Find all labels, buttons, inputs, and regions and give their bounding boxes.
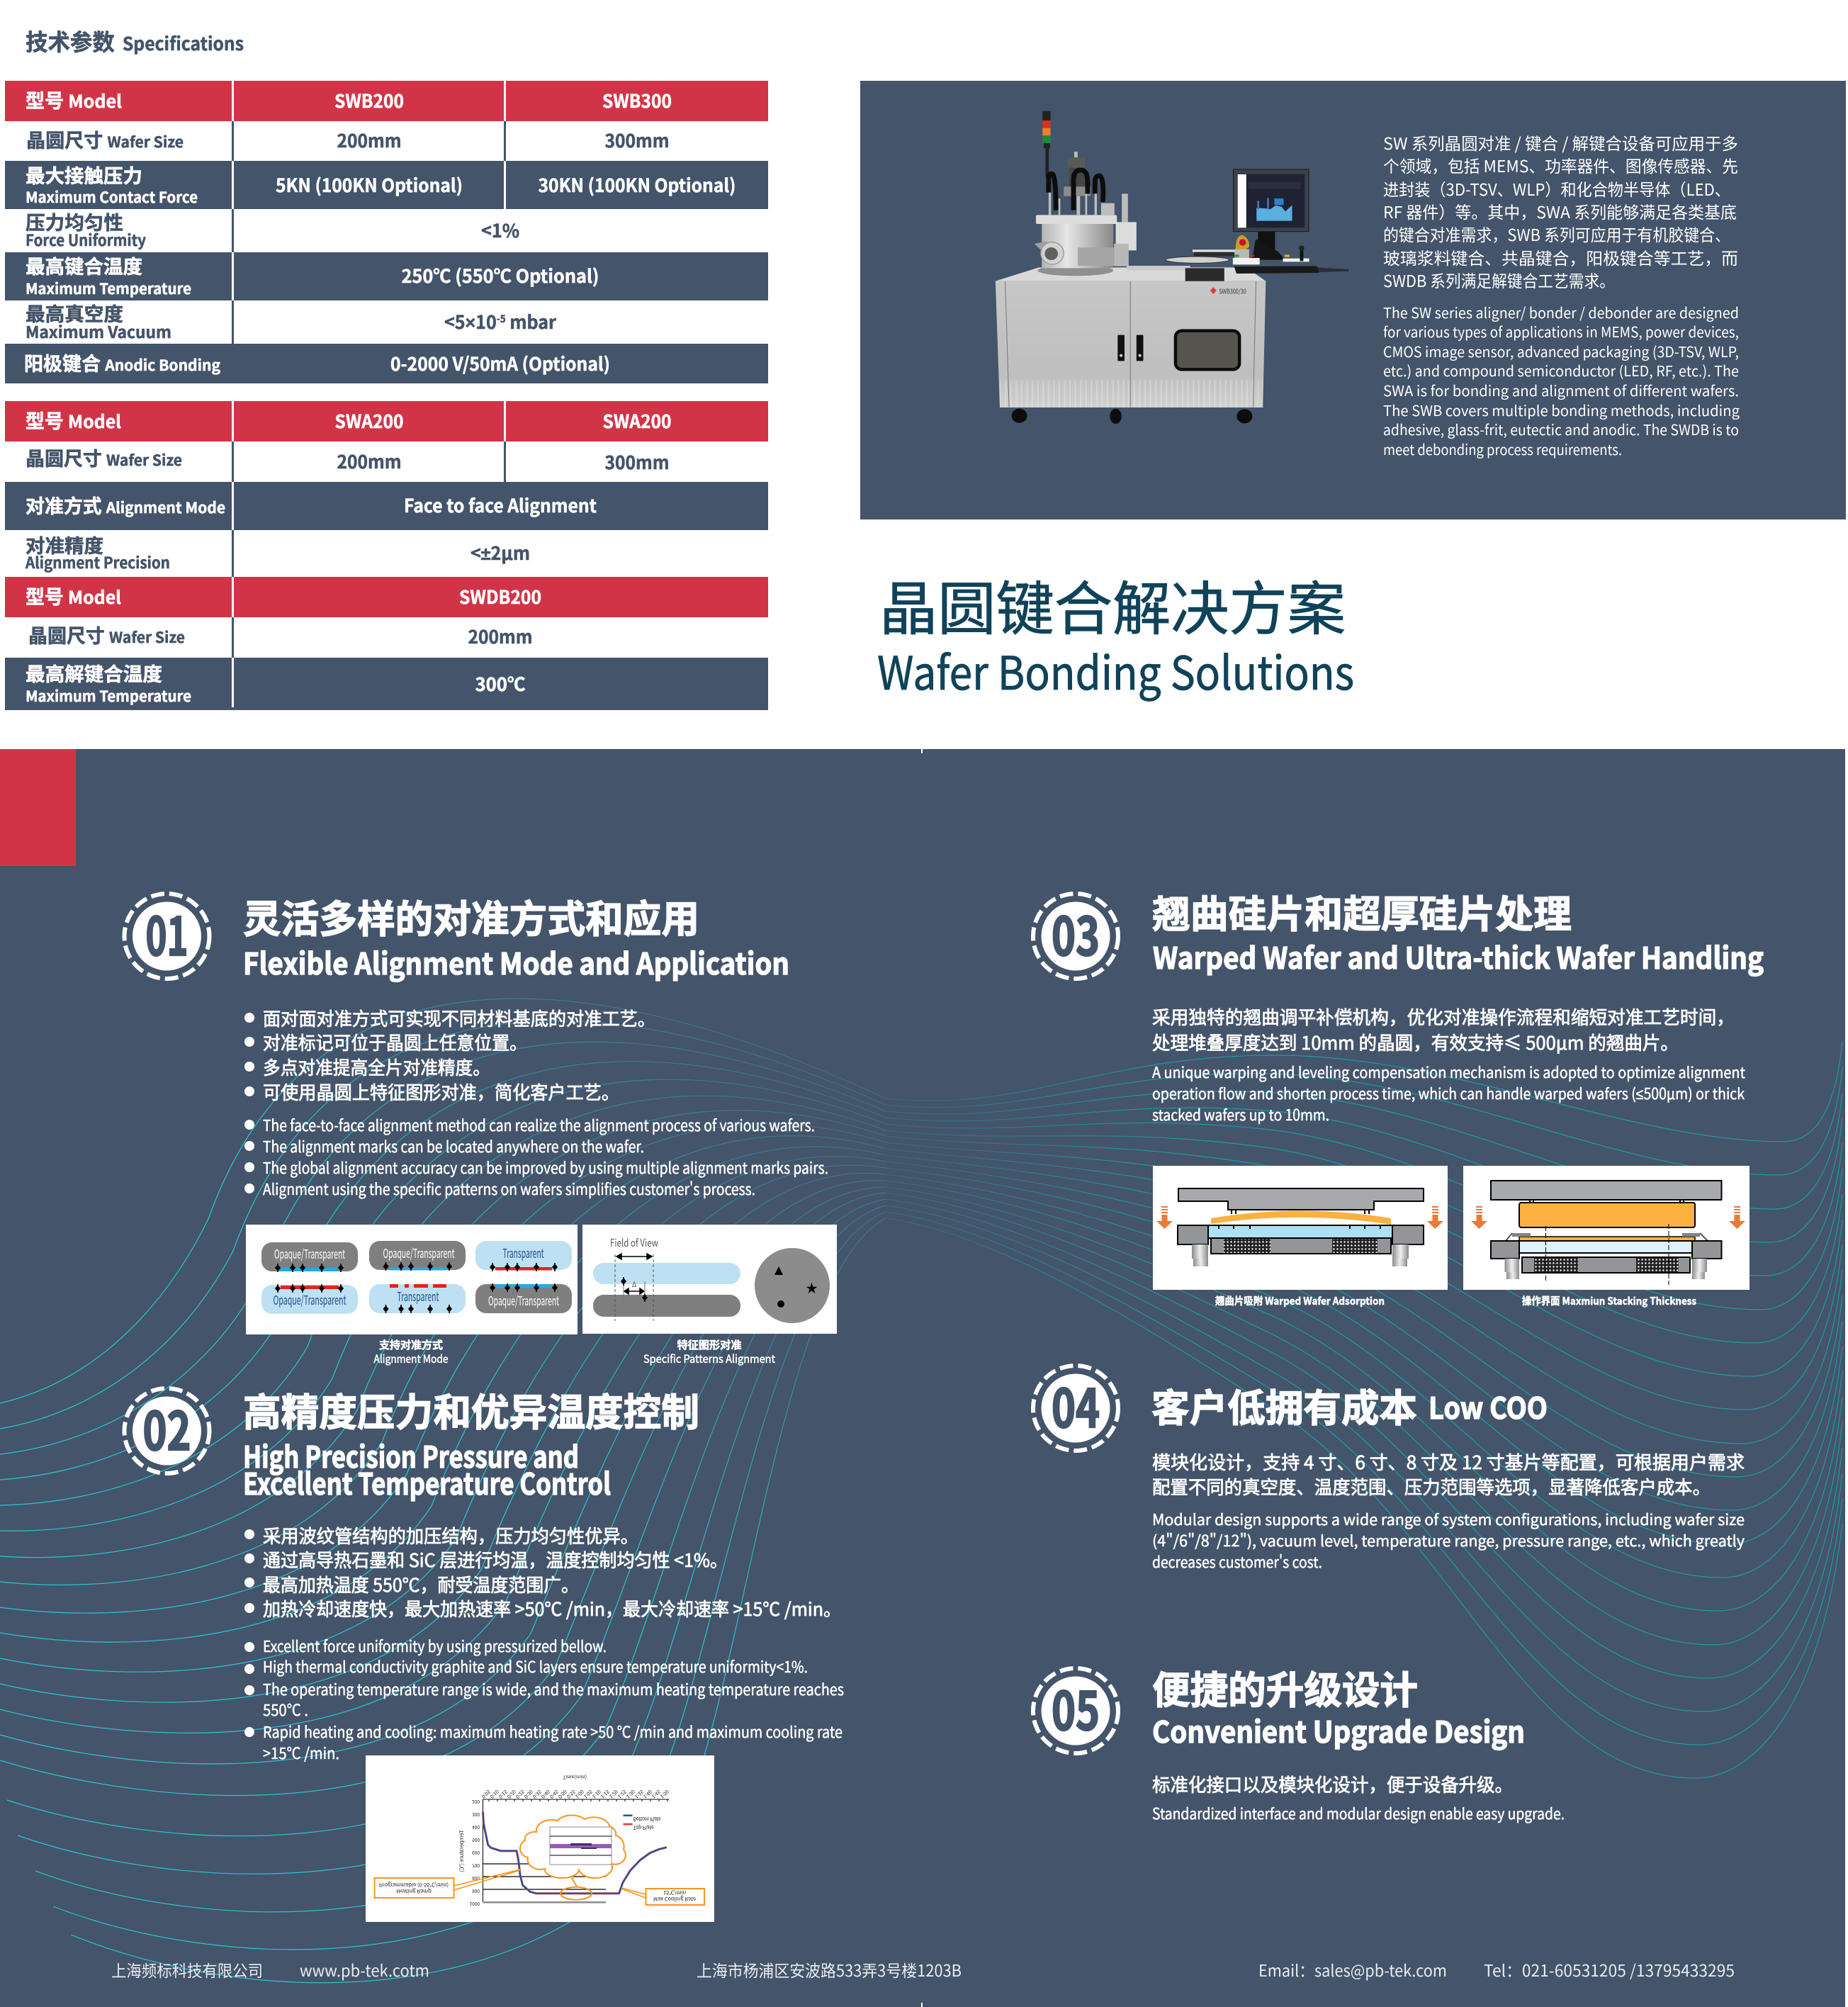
row: wafer size SWA: 200mm — [337, 448, 401, 474]
chart: temperature profile: Top Plate — [633, 1823, 654, 1831]
text: Chinese overview: SW 系列晶圆对准 / 键合 / 解键合设备可应用于多 — [1383, 130, 1738, 154]
row: wafer size: 300mm — [605, 127, 669, 153]
list: 01 English bullets — [244, 1113, 828, 1200]
diagram: alignment modes: Opaque/Transparent — [274, 1291, 346, 1309]
footer: contact information — [111, 1957, 1735, 1981]
row: maximum bonding temperature — [26, 252, 599, 299]
chart: temperature profile: 0:20 — [505, 1788, 517, 1800]
chart axis labels (flipped): 700 — [472, 1862, 480, 1870]
diagram: alignment modes: Opaque/Transparent — [488, 1291, 559, 1310]
chart: temperature profile: 1:30 — [624, 1788, 636, 1800]
section 04: low COO — [1033, 1366, 1745, 1573]
text: English overview: SWA is for bonding and alignment of different wafers. — [1383, 379, 1739, 400]
row: model SWA: SWA200 — [602, 407, 672, 434]
row: model: SWB200 — [334, 87, 404, 113]
chart: temperature profile: 1:45 — [650, 1788, 662, 1800]
text: English overview: meet debonding process requirements. — [1383, 438, 1622, 459]
illustration: bonding machine — [996, 111, 1348, 424]
text: 03 Chinese paragraph — [1152, 1004, 1735, 1055]
text: Chinese overview: 的键合对准需求，SWB 系列可应用于有机胶键合、 — [1383, 222, 1730, 246]
text: 04 English paragraph: Modular design supports a wide range of system configurations, including wafer size — [1152, 1508, 1745, 1530]
row: force uniformity: Force Uniformity — [26, 228, 146, 251]
row: anodic bonding — [24, 349, 610, 376]
chart axis labels (flipped): 600 — [472, 1850, 480, 1857]
chart: temperature profile: 1:05 — [582, 1788, 594, 1800]
table: SWB specifications — [5, 81, 768, 383]
row: maximum debonding temperature: 300℃ — [475, 670, 526, 697]
row: alignment precision: 对准精度 — [26, 531, 103, 558]
icon: down arrow right — [1427, 1206, 1443, 1229]
badge: 03 — [1033, 894, 1118, 979]
row: model — [26, 86, 672, 113]
heading: specifications: 技术参数 Specifications — [26, 24, 244, 57]
chart: temperature profile: 0:50 — [556, 1788, 568, 1800]
badge: 02 — [125, 1388, 210, 1473]
diagram: alignment modes: Opaque/Transparent — [274, 1244, 345, 1263]
row: maximum bonding temperature: Maximum Temperature — [26, 278, 191, 299]
list: 02 English bullets: Rapid heating and cooling: maximum heating rate >50 ℃ /min and maximum cooling rate — [263, 1720, 843, 1743]
chart: temperature profile: 0:15 — [497, 1788, 509, 1800]
table: SWA and SWDB specifications — [5, 401, 768, 710]
caption: warped wafer adsorption: 翘曲片吸附 Warped Wafer Adsorption — [1215, 1293, 1385, 1308]
row: maximum contact force: 最大接触压力 — [26, 161, 142, 189]
heading: 04: 客户低拥有成本 — [1151, 1377, 1417, 1433]
text: English overview: etc.) and compound semiconductor (LED, RF, etc.). The — [1383, 359, 1739, 381]
caption: alignment mode — [374, 1337, 448, 1366]
chart axis labels (flipped) — [470, 1799, 480, 1908]
panel: product overview — [860, 81, 1846, 519]
text: English overview: The SWB covers multiple bonding methods, including — [1383, 399, 1740, 420]
chart: temperature profile: 1:10 — [590, 1788, 602, 1800]
text: Chinese overview: 进封装（3D-TSV、WLP）和化合物半导体（LED、 — [1383, 176, 1730, 201]
section 03: warped wafer handling — [1033, 883, 1764, 1308]
row: model SWDB: 型号 Model — [26, 582, 121, 609]
chart: temperature profile: 1:50 — [658, 1788, 670, 1800]
chart: temperature profile: 1:35 — [633, 1788, 645, 1800]
chart axis labels (flipped): 500 — [472, 1837, 480, 1844]
row: alignment precision: <±2µm — [471, 539, 530, 566]
diagram: specific patterns: Field of View — [610, 1235, 658, 1250]
section 02: pressure and temperature — [125, 1381, 844, 1922]
caption: maximum stacking thickness: 操作界面 Maxmiun Stacking Thickness — [1522, 1293, 1696, 1308]
row: wafer size SWDB: 200mm — [468, 623, 533, 649]
section 01: flexible alignment — [125, 888, 837, 1366]
chart axis labels (flipped): 200 — [472, 1799, 480, 1806]
row: maximum bonding temperature: 250℃ (550℃ Optional) — [401, 262, 599, 288]
row: force uniformity — [26, 208, 519, 251]
chart axis labels (flipped): 1000 — [470, 1901, 480, 1908]
text: 03 English paragraph: operation flow and shorten process time, which can handle warped wafers (≤500µm) or thick — [1152, 1082, 1745, 1104]
diagram: warped wafer adsorption — [1153, 1166, 1448, 1290]
row: maximum vacuum: <5×10 — [444, 308, 497, 334]
row: wafer size SWA — [26, 444, 669, 475]
row: alignment mode — [26, 491, 597, 519]
chart: temperature profile: 0:55 — [565, 1788, 577, 1800]
badge: 02: 02 — [143, 1390, 191, 1466]
row: model SWDB — [26, 582, 541, 609]
chart axis labels (flipped): 400 — [472, 1824, 480, 1831]
text: 04 English paragraph: (4"/6"/8"/12"), vacuum level, temperature range, pressure range, etc., which greatly — [1152, 1529, 1745, 1551]
list: 02 Chinese bullets: 加热冷却速度快，最大加热速率 >50℃ /min，最大冷却速率 >15℃ /min。 — [263, 1595, 841, 1621]
text: 03 Chinese paragraph: 处理堆叠厚度达到 10mm 的晶圆，有效支持≤ 500µm 的翘曲片。 — [1152, 1029, 1679, 1055]
text: English overview — [1383, 301, 1740, 459]
badge: 01 — [125, 894, 210, 979]
heading: 03 English: Warped Wafer and Ultra-thick Wafer Handling — [1153, 935, 1764, 978]
chart axis labels (flipped): 300 — [472, 1811, 480, 1818]
heading: 05 English: Convenient Upgrade Design — [1152, 1709, 1525, 1752]
row: maximum debonding temperature — [26, 659, 526, 707]
chart: temperature profile: 1:00 — [573, 1788, 585, 1800]
illustration: bonding machine: SWB300/30 — [1219, 286, 1246, 296]
badge: 05 — [1033, 1668, 1118, 1753]
heading: 04 — [1151, 1377, 1548, 1433]
list: 02 English bullets: Excellent force uniformity by using pressurized bellow. — [263, 1634, 607, 1657]
row: maximum vacuum: 最高真空度 — [26, 299, 123, 327]
heading: 02 Chinese: 高精度压力和优异温度控制 — [243, 1381, 699, 1437]
heading: 02 English — [243, 1434, 611, 1504]
list: 01 Chinese bullets: 对准标记可位于晶圆上任意位置。 — [263, 1029, 527, 1055]
list: 01 Chinese bullets — [244, 1005, 655, 1105]
chart: temperature profile: 1:40 — [641, 1788, 653, 1800]
caption: specific patterns — [643, 1337, 775, 1366]
list: 02 Chinese bullets — [244, 1522, 841, 1621]
text: Chinese overview: 个领域，包括 MEMS、功率器件、图像传感器、先 — [1383, 153, 1738, 177]
row: wafer size: 200mm — [337, 127, 401, 153]
badge: 03: 03 — [1052, 895, 1100, 971]
row: wafer size SWA: 300mm — [605, 449, 669, 475]
footer: contact information: 上海市杨浦区安波路533弄3号楼1203B — [697, 1957, 962, 1981]
chart: temperature profile: 15℃/min — [663, 1889, 686, 1896]
list: 02 English bullets: >15℃ /min. — [263, 1741, 339, 1764]
row: maximum contact force: 30KN (100KN Optional) — [539, 172, 736, 198]
footer: contact information: www.pb-tek.cotm — [300, 1957, 429, 1981]
row: model: 型号 Model — [26, 86, 122, 113]
diagram: maximum stacking thickness — [1463, 1166, 1750, 1290]
section 05: upgrade design — [1033, 1659, 1565, 1824]
heading: 04: Low COO — [1429, 1385, 1548, 1428]
text: Chinese overview — [1383, 130, 1738, 292]
row: model SWA — [26, 406, 672, 434]
diagram: alignment modes: Opaque/Transparent — [383, 1244, 455, 1262]
chart axis labels (flipped): 900 — [472, 1888, 480, 1895]
chart: temperature profile: Heating Ramp — [396, 1887, 432, 1895]
heading: 03 Chinese: 翘曲硅片和超厚硅片处理 — [1152, 883, 1572, 939]
icon: down arrow left — [1471, 1206, 1487, 1229]
row: wafer size SWDB: 晶圆尺寸 Wafer Size — [28, 621, 185, 648]
row: maximum vacuum: -5 — [497, 312, 506, 326]
text: English overview: for various types of applications in MEMS, power devices, — [1383, 320, 1739, 342]
text: 04 Chinese paragraph: 模块化设计，支持 4 寸、6 寸、8 寸及 12 寸基片等配置，可根据用户需求 — [1152, 1449, 1745, 1475]
badge: 04: 04 — [1052, 1367, 1100, 1443]
chart: temperature profile: 0:35 — [531, 1788, 543, 1800]
heading: 02 English: High Precision Pressure and — [243, 1434, 579, 1477]
title: Chinese: 晶圆键合解决方案 — [879, 562, 1346, 646]
row: model SWA: 型号 Model — [26, 406, 121, 434]
text: Chinese overview: 玻璃浆料键合、共晶键合，阳极键合等工艺，而 — [1383, 245, 1738, 269]
row: wafer size SWDB — [28, 621, 533, 649]
heading: 01 English: Flexible Alignment Mode and Application — [243, 940, 789, 984]
diagram: specific patterns: Δ — [632, 1278, 637, 1289]
row: wafer size — [26, 125, 669, 153]
row: alignment precision: Alignment Precision — [25, 551, 170, 573]
row: alignment mode: 对准方式 Alignment Mode — [26, 491, 225, 519]
title: English: Wafer Bonding Solutions — [877, 636, 1354, 703]
text: English overview: The SW series aligner/ bonder / debonder are designed — [1383, 301, 1739, 322]
row: model SWA: SWA200 — [334, 407, 404, 434]
row: maximum vacuum: mbar — [506, 308, 557, 334]
text: English overview: adhesive, glass-frit, eutectic and anodic. The SWDB is to — [1383, 418, 1739, 439]
chart axis labels (flipped): 800 — [472, 1875, 480, 1882]
list: 01 English bullets: Alignment using the specific patterns on wafers simplifies customer's process. — [263, 1177, 755, 1200]
row: alignment mode: Face to face Alignment — [404, 492, 597, 518]
chart: temperature profile: 0:10 — [488, 1788, 500, 1800]
row: maximum debonding temperature: 最高解键合温度 — [26, 659, 162, 687]
row: maximum vacuum — [26, 299, 557, 343]
text: 03 English paragraph — [1152, 1061, 1745, 1125]
icon: down arrow left — [1156, 1206, 1173, 1229]
caption: specific patterns: Specific Patterns Alignment — [643, 1351, 775, 1366]
list: 02 Chinese bullets: 采用波纹管结构的加压结构，压力均匀性优异。 — [263, 1522, 638, 1548]
chart: temperature profile: 0:05 — [480, 1788, 492, 1800]
diagram: specific patterns: ★ — [806, 1278, 818, 1296]
row: anodic bonding: 0-2000 V/50mA (Optional) — [390, 350, 610, 376]
chart: temperature profile: 0:30 — [522, 1788, 534, 1800]
diagram: specific patterns — [582, 1225, 837, 1334]
list: 01 Chinese bullets: 可使用晶圆上特征图形对准，简化客户工艺。 — [263, 1079, 619, 1105]
badge: 05: 05 — [1052, 1670, 1100, 1745]
chart: temperature profile: 1:15 — [599, 1788, 611, 1800]
badge: 04 — [1033, 1366, 1118, 1451]
text: Chinese overview: SWDB 系列满足解键合工艺需求。 — [1383, 268, 1615, 292]
list: 02 Chinese bullets: 通过高导热石墨和 SiC 层进行均温，温度控制均匀性 <1%。 — [263, 1546, 728, 1573]
list: 01 Chinese bullets: 多点对准提高全片对准精度。 — [263, 1054, 490, 1080]
list: 02 English bullets: 550℃ . — [263, 1698, 308, 1721]
diagram: alignment modes: Transparent — [503, 1244, 544, 1262]
icon: down arrow right — [1729, 1206, 1745, 1229]
text: 04 English paragraph — [1152, 1508, 1745, 1573]
list: 02 English bullets: High thermal conductivity graphite and SiC layers ensure temperature uniformity<1%. — [263, 1655, 808, 1677]
panel: feature background — [0, 749, 1845, 2007]
chart: temperature profile: 1:20 — [607, 1788, 619, 1800]
caption: specific patterns: 特征图形对准 — [677, 1337, 741, 1352]
row: maximum contact force: Maximum Contact Force — [26, 186, 198, 208]
chart: temperature profile: Programmable (0-55℃/min) — [379, 1881, 449, 1889]
heading: 01 Chinese: 灵活多样的对准方式和应用 — [243, 888, 699, 944]
list: 02 Chinese bullets: 最高加热温度 550℃，耐受温度范围广。 — [263, 1571, 579, 1597]
text: Chinese overview: RF 器件）等。其中，SWA 系列能够满足各类基底 — [1383, 199, 1737, 223]
caption: alignment mode: Alignment Mode — [374, 1351, 448, 1366]
text: 04 Chinese paragraph: 配置不同的真空度、温度范围、压力范围等选项，显著降低客户成本。 — [1152, 1473, 1711, 1500]
row: model: SWB300 — [602, 87, 672, 113]
heading: 05 Chinese: 便捷的升级设计 — [1152, 1659, 1418, 1715]
row: maximum contact force: 5KN (100KN Optional) — [276, 172, 463, 198]
text: English overview: CMOS image sensor, advanced packaging (3D-TSV, WLP, — [1383, 340, 1739, 361]
chart: temperature profile: 0:40 — [539, 1788, 551, 1800]
footer: contact information: Email：sales@pb-tek.com — [1258, 1957, 1447, 1981]
row: maximum vacuum: Maximum Vacuum — [26, 319, 171, 343]
diagram: alignment modes — [246, 1225, 578, 1334]
chart: temperature profile: Temperature (℃) — [458, 1830, 466, 1872]
list: 02 English bullets: The operating temperature range is wide, and the maximum heating temperature reaches — [263, 1677, 844, 1700]
list: 01 English bullets: The alignment marks can be located anywhere on the wafer. — [263, 1135, 644, 1157]
row: model SWDB: SWDB200 — [459, 583, 541, 609]
chart: temperature profile: 1:25 — [616, 1788, 628, 1800]
diagram: alignment modes: Transparent — [397, 1287, 439, 1305]
list: 01 English bullets: The face-to-face alignment method can realize the alignment process of various wafers. — [263, 1113, 815, 1136]
row: wafer size: 晶圆尺寸 Wafer Size — [26, 125, 184, 153]
row: wafer size SWA: 晶圆尺寸 Wafer Size — [26, 444, 182, 471]
text: 03 English paragraph: stacked wafers up to 10mm. — [1152, 1103, 1329, 1125]
chart: temperature profile: 0:25 — [514, 1788, 526, 1800]
row: maximum contact force — [26, 161, 736, 208]
heading: 02 English: Excellent Temperature Control — [243, 1461, 611, 1504]
chart: temperature profile: Time(min) — [563, 1773, 587, 1780]
row: alignment precision — [25, 531, 530, 573]
text: 04 Chinese paragraph — [1152, 1449, 1745, 1500]
footer: contact information: Tel：021-60531205 /13795433295 — [1484, 1957, 1735, 1981]
chart: temperature profile: Max Cooling Rate — [653, 1895, 696, 1903]
text: 05 English paragraph: Standardized interface and modular design enable easy upgrade. — [1152, 1802, 1565, 1824]
decoration: red corner block — [0, 749, 76, 866]
caption: alignment mode: 支持对准方式 — [379, 1337, 443, 1352]
list: 01 English bullets: The global alignment accuracy can be improved by using multiple alignment marks pairs. — [263, 1156, 828, 1179]
text: 03 Chinese paragraph: 采用独特的翘曲调平补偿机构，优化对准操作流程和缩短对准工艺时间， — [1152, 1004, 1735, 1030]
text: 03 English paragraph: A unique warping and leveling compensation mechanism is adopted to optimize alignment — [1152, 1061, 1745, 1083]
chart: temperature profile: Bottom Plate — [633, 1815, 661, 1823]
row: force uniformity: <1% — [481, 217, 519, 243]
text: 04 English paragraph: decreases customer's cost. — [1152, 1551, 1322, 1573]
row: maximum debonding temperature: Maximum Temperature — [26, 685, 191, 707]
chart: temperature profile: 0:45 — [548, 1788, 560, 1800]
text: 05 Chinese paragraph: 标准化接口以及模块化设计，便于设备升级。 — [1152, 1771, 1513, 1797]
row: anodic bonding: 阳极键合 Anodic Bonding — [24, 349, 220, 376]
badge: 01: 01 — [146, 895, 188, 971]
list: 01 Chinese bullets: 面对面对准方式可实现不同材料基底的对准工艺。 — [263, 1005, 655, 1031]
row: maximum bonding temperature: 最高键合温度 — [26, 252, 142, 279]
list: 02 English bullets — [244, 1634, 844, 1764]
chart: temperature profile — [366, 1755, 714, 1922]
footer: contact information: 上海频标科技有限公司 — [111, 1957, 263, 1981]
row: force uniformity: 压力均匀性 — [26, 208, 123, 235]
